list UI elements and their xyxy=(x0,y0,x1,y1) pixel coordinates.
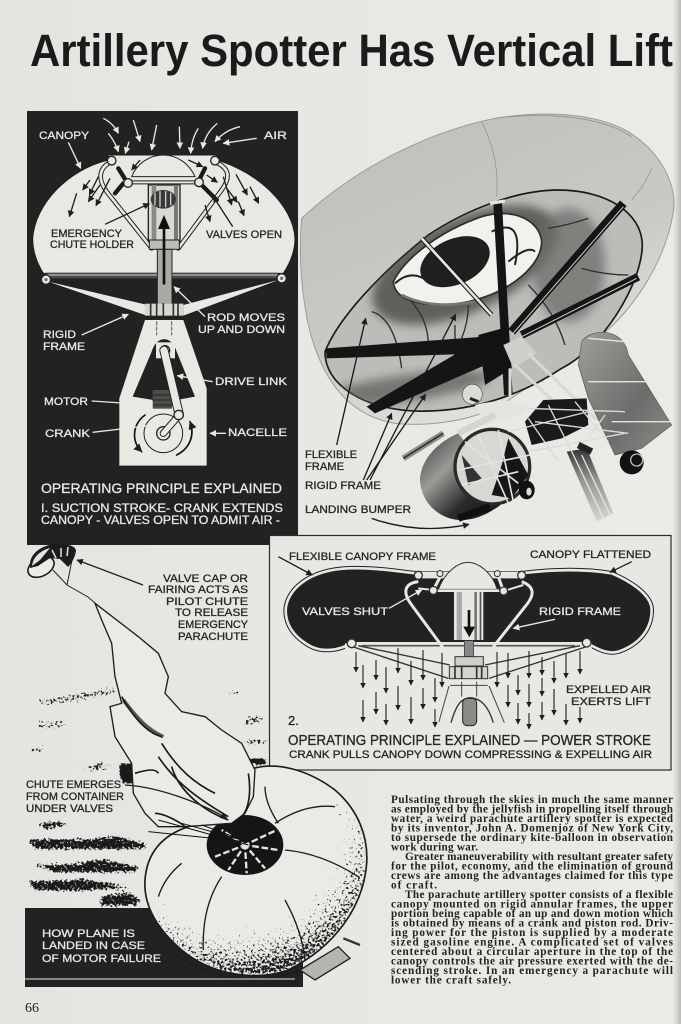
caption: suction stroke: CANOPY - VALVES OPEN TO ADMIT AIR - xyxy=(41,515,280,527)
text block: article body: Greater maneuverability with resultant greater safety xyxy=(405,851,673,863)
drive link xyxy=(164,350,179,415)
text block: article body: crews are among the advantages claimed for this type xyxy=(391,870,673,882)
caption: power stroke: OPERATING PRINCIPLE EXPLAINED — POWER STROKE xyxy=(288,733,651,749)
icon: emergency chute holder xyxy=(151,190,176,209)
text block: article body: portion being capable of an up and down motion which xyxy=(391,908,674,920)
text block: article body: as employed by the jellyfish in propelling itself through xyxy=(391,804,674,816)
text block: article body: scending stroke. In an emergency a parachute will xyxy=(391,965,673,977)
label: valve cap: EMERGENCY xyxy=(178,619,249,631)
label: rigid frame: RIGID xyxy=(43,329,76,341)
label: emergency chute holder xyxy=(50,228,134,251)
label: motor: MOTOR xyxy=(44,396,88,408)
text block: article body: to supersede the ordinary kite-balloon in observation xyxy=(391,832,674,844)
label: nacelle: NACELLE xyxy=(228,427,287,439)
pilot chute cap xyxy=(24,544,95,603)
balloon canopy xyxy=(95,603,367,980)
text block: article body xyxy=(391,794,674,986)
text block: article body: water, a weird parachute artillery spotter is expected xyxy=(391,813,674,825)
text block: article body: is obtained by means of a crank and piston rod. Driv- xyxy=(391,918,673,930)
black caption band xyxy=(25,908,303,987)
pilot and frame lattice xyxy=(525,398,588,445)
illustration: emergency parachute landing xyxy=(24,544,367,987)
panel: power stroke diagram xyxy=(270,536,671,770)
rigid frame xyxy=(48,280,278,316)
caption: how plane is landed: LANDED IN CASE xyxy=(42,940,145,952)
label: expelled air exerts lift: EXPELLED AIR xyxy=(566,684,651,696)
label: emergency chute holder: CHUTE HOLDER xyxy=(50,239,134,251)
label: canopy flattened: CANOPY FLATTENED xyxy=(530,549,651,561)
white rule in caption band xyxy=(25,978,295,980)
spars xyxy=(326,337,487,358)
valves and cap xyxy=(438,562,497,589)
tail fin xyxy=(578,332,672,455)
label: valve cap xyxy=(148,573,249,643)
text block: article body: sized gasoline engine. A complicated set of valves xyxy=(391,936,674,948)
text block: article body: centered about a circular aperture in the top of the xyxy=(391,946,673,958)
page number: 66 xyxy=(25,1001,39,1016)
rigid struts xyxy=(406,582,532,662)
air and pointer arrows xyxy=(68,118,259,433)
label: rigid frame xyxy=(43,329,85,353)
text block: article body: ing power for the piston is supplied by a moderate xyxy=(391,927,673,939)
label: valve cap: PARACHUTE xyxy=(178,631,248,643)
label: valve cap: FAIRING ACTS AS xyxy=(148,584,248,596)
expelled air arrows xyxy=(356,648,580,729)
motor xyxy=(153,390,172,409)
caption: how plane is landed xyxy=(42,928,161,965)
caption: how plane is landed: OF MOTOR FAILURE xyxy=(42,953,161,965)
text block: article body: The parachute artillery spotter consists of a flexible xyxy=(405,889,673,901)
inner canopy xyxy=(325,190,642,411)
aperture xyxy=(393,213,542,305)
label: rod moves: UP AND DOWN xyxy=(198,324,285,336)
text block: article body: lower the craft safely. xyxy=(391,974,511,986)
panel: suction stroke diagram xyxy=(27,111,298,545)
text block: article body: canopy mounted on rigid annular frames, the upper xyxy=(391,898,673,910)
label: valves shut: VALVES SHUT xyxy=(302,606,388,618)
caption: suction stroke xyxy=(41,480,283,527)
caption: suction stroke: OPERATING PRINCIPLE EXPLAINED xyxy=(41,480,282,496)
caption: power stroke: CRANK PULLS CANOPY DOWN COMPRESSING & EXPELLING AIR xyxy=(289,749,652,761)
pointer arrows xyxy=(337,314,469,528)
label: valves open: VALVES OPEN xyxy=(206,229,282,241)
label: canopy: CANOPY xyxy=(39,130,90,142)
caption: power stroke xyxy=(288,733,652,761)
canopy cross-section xyxy=(33,155,295,466)
label: rigid frame: RIGID FRAME xyxy=(305,480,381,492)
pointers xyxy=(278,557,632,628)
canopy rim xyxy=(300,114,674,424)
label: expelled air exerts lift xyxy=(566,684,651,708)
canister xyxy=(300,947,350,980)
label: flexible canopy frame: FLEXIBLE CANOPY FRAME xyxy=(289,551,436,563)
text block: article body: for the pilot, economy, and the elimination of ground xyxy=(391,860,674,872)
label: number 2: 2. xyxy=(288,713,299,728)
hub xyxy=(207,815,283,875)
label: rigid frame: FRAME xyxy=(43,341,85,353)
ground and clouds xyxy=(25,687,268,907)
label: valve cap: VALVE CAP OR xyxy=(163,573,248,585)
label: rod moves: ROD MOVES xyxy=(207,312,285,324)
label: valve cap: PILOT CHUTE xyxy=(166,596,248,608)
label: crank: CRANK xyxy=(45,428,91,440)
label: valve cap: TO RELEASE xyxy=(175,607,248,619)
label: chute emerges: CHUTE EMERGES xyxy=(26,779,121,791)
text block: article body: Pulsating through the skies in much the same manner xyxy=(391,794,673,806)
exhaust streaks xyxy=(567,448,613,522)
text block: article body: work during war. xyxy=(391,842,478,854)
label: rod moves xyxy=(198,312,285,336)
pointer: valve cap xyxy=(77,560,143,585)
crank xyxy=(144,414,183,453)
flattened canopy cross-section xyxy=(278,557,652,726)
billowing emergency parachute xyxy=(95,603,255,827)
illustration: spotter aircraft from below xyxy=(300,114,674,528)
lower frame xyxy=(352,646,587,678)
label: landing bumper: LANDING BUMPER xyxy=(305,504,411,516)
label: emergency chute holder: EMERGENCY xyxy=(51,228,123,240)
nacelle xyxy=(119,320,207,466)
caption: suction stroke: I. SUCTION STROKE- CRANK EXTENDS xyxy=(41,501,283,515)
label: flexible frame: FLEXIBLE xyxy=(305,449,357,461)
engine drum xyxy=(420,433,508,520)
label: flexible frame xyxy=(305,449,357,473)
label: chute emerges: FROM CONTAINER xyxy=(26,791,124,803)
label: air: AIR xyxy=(264,130,287,142)
label: chute emerges xyxy=(26,779,124,815)
text block: article body: by its inventor, John A. Domenjoz of New York City, xyxy=(391,822,673,834)
caption: how plane is landed: HOW PLANE IS xyxy=(42,928,135,940)
text block: article body: canopy controls the air pressure exerted with the de- xyxy=(391,956,673,968)
label: chute emerges: UNDER VALVES xyxy=(26,803,113,815)
text block: article body: of craft. xyxy=(391,880,437,892)
label: expelled air exerts lift: EXERTS LIFT xyxy=(571,696,651,708)
label: drive link: DRIVE LINK xyxy=(215,376,288,388)
label: flexible frame: FRAME xyxy=(305,461,344,473)
label: rigid frame: RIGID FRAME xyxy=(539,606,621,618)
